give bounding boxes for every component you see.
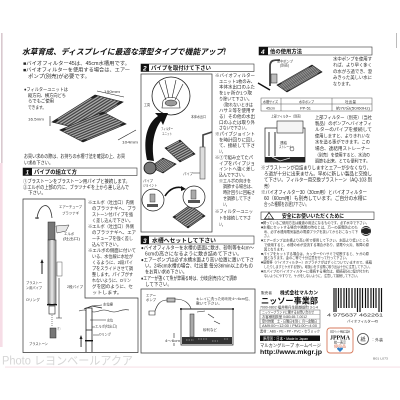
purchase note bbox=[24, 153, 125, 166]
step 1 side text: ※エルボ（吐出口）内側 bbox=[88, 199, 134, 206]
assembly diagram labels: ブラストーン bbox=[29, 341, 48, 346]
step 1 side text: ットします。 bbox=[92, 289, 122, 296]
assembly diagram labels: ン用パイプ bbox=[26, 285, 42, 290]
step 1 heading bbox=[23, 168, 137, 176]
step 2 side text: 口のふたは取り外 bbox=[219, 119, 255, 126]
step 2 side text: さないで下さい。 bbox=[219, 125, 249, 132]
vendor information block: 素材：ABS・PE・PP・PVC・セラミック bbox=[260, 328, 320, 334]
submersible pump drawing: 水中ポンプ bbox=[277, 58, 293, 64]
vendor information block: AM9:00〜12:00 / PM1:00〜4:00 bbox=[262, 324, 317, 328]
upper filter text: 使用しますと、よりきれいな bbox=[315, 132, 370, 140]
step 2 side text: ※エルボの向きを bbox=[219, 177, 251, 183]
step 3 instructions: い。245cm水槽の場合、吐出量 毎分3ℓ/min以上のもの bbox=[145, 262, 253, 270]
filter unit label: ユニット bbox=[162, 132, 172, 136]
step 2 side text: ※①で組み立てたパ bbox=[215, 154, 253, 161]
step 4 heading: 4 bbox=[260, 49, 265, 56]
upper filter text: 水を造る事ができます。この bbox=[315, 138, 370, 146]
assembly diagram labels: ブラストー bbox=[26, 280, 42, 285]
submersible pump text: の水がろ過でき、澄 bbox=[333, 68, 372, 75]
upper filter text: 場合、連結用ストレーナー bbox=[315, 145, 370, 152]
blast stone notes: ※バイオフィルター30（30cm用）とバイオフィルター bbox=[261, 189, 367, 196]
tank setup diagram frame bbox=[141, 289, 255, 353]
step 3 instructions bbox=[141, 244, 254, 288]
safety fine print: 因となります。 bbox=[264, 246, 286, 251]
step 2 side text: を1ヶ所か1つ取 bbox=[219, 90, 252, 97]
step 3 instructions: ●バイオフィルターを水槽の底面に敷き、砂利等を4cm〜 bbox=[141, 244, 254, 252]
safety fine print: ■飼っているご使用方法は最適の用法になるものです。必ず水中で下さい。 bbox=[261, 220, 369, 225]
step 1 side text: 整します。パイプがす bbox=[92, 271, 133, 278]
filter unit note: 縦方向、横方向どち bbox=[28, 92, 66, 99]
step 3 instructions: をお買い求め下さい。 bbox=[145, 268, 187, 276]
intro notes bbox=[23, 60, 130, 80]
step 1 side text: ストーン付パイプを強 bbox=[92, 211, 133, 218]
barcode: バイオフィルター45 bbox=[347, 318, 378, 324]
filter unit drawing with dimensions: 16.5mm bbox=[28, 118, 44, 122]
blast stone notes: ろ過が十分に出来ません。早めに新しい製品と交換し bbox=[264, 170, 372, 178]
pump compatibility table bbox=[261, 98, 372, 111]
filter unit drawing with dimensions: 190mm bbox=[104, 90, 120, 94]
step 1 instructions bbox=[23, 178, 130, 196]
vendor information block: マルカングループ ホームページ bbox=[260, 342, 321, 349]
pipe joint detail circles: パイプ bbox=[143, 178, 153, 183]
safety fine print: め、必ず水槽用電気製品の電源プラグを抜いてからおこなって下 bbox=[264, 229, 358, 234]
vendor information block: 販売者 bbox=[261, 290, 272, 295]
safety fine print: で使用すると、水槽の水が逆流する場合があり、感電や火災、故障の原 bbox=[264, 242, 369, 247]
filter unit drawing with dimensions: 104mm bbox=[122, 140, 138, 144]
safety fine print: ■のパイプのバイオフィルターに接続する場合は、接続部分に傷が付かれ bbox=[261, 268, 369, 273]
submersible pump text: みきった美しい水に bbox=[333, 74, 372, 81]
step 1 side text: のブラツナギへ、ブラ bbox=[92, 205, 136, 212]
title: 水草育成、ディスプレイに最適な薄型タイプで機能アップ! bbox=[22, 48, 226, 56]
watermark: Photo レヨンベールアクア bbox=[2, 354, 133, 368]
JPPMA badge bbox=[327, 328, 353, 353]
vendor information block: 原産国：日本・Made in Japan bbox=[263, 335, 308, 341]
submersible pump text: なります。 bbox=[333, 80, 353, 88]
step 2 heading: 2 bbox=[142, 66, 147, 72]
upper filter drawing: 上部フィルター（別売） bbox=[271, 114, 303, 118]
pump compatibility table: 水中ポンプ bbox=[299, 99, 314, 104]
step 2 side text: 時計回りに回転さ bbox=[223, 189, 255, 196]
safety fine print: したりしますとケガする恐れ。取扱いをする際に取り出は十分に注意して下さい。 bbox=[264, 264, 372, 269]
step 2 side text: を時計回りに回し bbox=[219, 136, 255, 143]
upper filter text: （別売）を使用すると、水流の bbox=[315, 152, 370, 158]
blast stone notes: 売） bbox=[264, 183, 272, 190]
assembly diagram labels: ブラツナギ bbox=[62, 210, 79, 216]
safety fine print: ■感電等（バイオフィルター）のプラチナがはずっとついていますので、紙箱 bbox=[261, 260, 372, 265]
step 2 side text: 調節する場合は、 bbox=[223, 183, 255, 190]
icon: paper recycling mark: ：外装 bbox=[371, 337, 383, 342]
JPPMA badge: 日本ペット用品工業会 bbox=[330, 330, 350, 334]
pipe joint detail circles: ジョイント bbox=[143, 184, 157, 188]
aquarium tank with pipe and gravel bbox=[180, 308, 234, 345]
step 1 instructions: ②エルボの上部の穴に、ブラツナギを上から差し込んで bbox=[23, 184, 129, 191]
vendor information block: 株式会社マルカン bbox=[280, 290, 318, 296]
pump compatibility table: 吐出量 bbox=[345, 99, 356, 104]
intro notes: ■バイオフィルター45は、45cm水槽用です。 bbox=[23, 60, 130, 67]
vendor information block: ニッソー事業部 bbox=[261, 296, 318, 306]
panel: step 3 set in tank bbox=[141, 236, 255, 353]
magnified outlet circle: 工具 bbox=[144, 102, 150, 107]
upper filter drawing bbox=[265, 114, 305, 162]
step 2 side text: ハサミ等を使用す bbox=[219, 107, 255, 114]
assembly diagram labels: エルボ bbox=[64, 231, 74, 236]
safety heading bbox=[261, 212, 374, 220]
assembly diagram frame bbox=[23, 199, 138, 352]
inset diagram: water level and O-ring: 水位線 bbox=[103, 302, 113, 306]
upper filter text: ルターのパイプを接続して bbox=[315, 126, 372, 133]
step 1 side text: 込んで下さい。 bbox=[92, 241, 121, 248]
magnified outlet circle: 本体水出口 bbox=[191, 114, 206, 119]
blast stone notes: ※ブラストーンが目詰まりしますとエアーが少なくなり、 bbox=[261, 164, 371, 172]
step 3 instructions: して下さい。 bbox=[145, 281, 172, 288]
step 2 side text: ※パイプジョイント bbox=[215, 132, 255, 138]
JPPMA badge: 統一表示 bbox=[334, 340, 346, 344]
step 2 side text: ※バイオフィルター bbox=[215, 72, 255, 79]
vertical pipe with spout: パイプ bbox=[183, 171, 193, 176]
intro notes: ポンプ(別売)が必要です。 bbox=[28, 73, 90, 80]
step 2 side text: 本体水出口のふた bbox=[219, 84, 255, 91]
safety fine print: ■水槽にセットする場合や隣間の時なとは、万一の感電防止のた bbox=[261, 224, 358, 229]
step 2 side text: ※フィルターユニッ bbox=[215, 208, 253, 215]
step 2 side text: ユニット1枚のみ、 bbox=[219, 78, 255, 85]
submersible pump drawing: (別売) bbox=[280, 62, 289, 68]
print code: B01 L073 bbox=[373, 356, 389, 360]
upper filter text: 調節も出来、とても便利です。 bbox=[315, 158, 370, 164]
inset diagram: water level and O-ring: 水位 bbox=[107, 318, 113, 322]
filter unit note bbox=[24, 86, 68, 111]
vendor information block: 受付時間 土・日曜日を除く 月〜金曜日 bbox=[262, 318, 317, 324]
barcode: 4 975637 462261 bbox=[327, 312, 384, 318]
step 4 heading bbox=[259, 47, 372, 56]
step 2 heading bbox=[141, 64, 254, 72]
step 2 drawing frame bbox=[141, 74, 212, 232]
step 1 side text bbox=[88, 199, 136, 296]
vendor information block: お客様相談室 0480-65-7-0012 bbox=[262, 314, 307, 319]
step 2 side text: い。 bbox=[223, 202, 229, 207]
tank labels and height dimension: 敷いて下さい。 bbox=[196, 300, 222, 306]
blast stone notes bbox=[261, 164, 372, 208]
step 2 side text: い。 bbox=[219, 222, 225, 227]
step 1 side text: れないように、Oリン bbox=[92, 277, 131, 284]
safety fine print bbox=[261, 220, 372, 278]
step 2 side text: イプをパイプジョ bbox=[219, 160, 255, 167]
blast stone notes: て下さい。フィルター用交換ブラストーン（AQ-103 別 bbox=[264, 176, 372, 184]
inset diagram: water level and O-ring: エルボ(吐出口) bbox=[95, 324, 117, 328]
panel: step 1 pipe assembly bbox=[23, 168, 138, 352]
safety heading: 安全にお使いいただくために bbox=[282, 212, 344, 220]
step 2 side text: せ調節して下さ bbox=[223, 195, 251, 202]
magnified outlet circle bbox=[144, 77, 206, 119]
step 1 heading: パイプの組立て方 bbox=[34, 168, 77, 176]
step 2 side text: て、接続して下さ bbox=[219, 142, 255, 149]
icon: paper recycling mark bbox=[358, 334, 383, 344]
air pump: エアー bbox=[146, 292, 156, 298]
panel: safety notice bbox=[261, 212, 374, 278]
step 4 heading: 他の使用方法 bbox=[270, 48, 302, 56]
air pump: ポンプ bbox=[146, 297, 156, 302]
step 3 instructions: ●エアーポンプは必ず水槽水面より高い位置に置いて下さ bbox=[141, 256, 254, 264]
panel: step 4 other uses bbox=[258, 47, 372, 208]
inset diagram: water level and O-ring bbox=[79, 302, 129, 352]
safety fine print: ないようにやすりで、ケガをしないように、注意して接続して下さい。 bbox=[264, 273, 360, 278]
tank labels and height dimension: 砂利など bbox=[203, 327, 217, 332]
blast stone notes: 60（60cm用）も別売しています。ご自分の水槽に bbox=[264, 195, 367, 202]
filter unit label bbox=[161, 126, 173, 136]
submersible pump text bbox=[333, 56, 372, 88]
step 2 side text: る）その他の水出 bbox=[219, 113, 255, 120]
tank labels and height dimension: 4〜6cm bbox=[165, 339, 180, 343]
step 1 side text: グを図のように、セ bbox=[92, 283, 133, 290]
intro notes: ■バイオフィルターを使用する場合は、エアー bbox=[23, 66, 130, 74]
safety fine print: 因となります。金のこ等で十分注意を行って行って下さい。 bbox=[264, 255, 349, 260]
safety fine print: ■パイプをカットする場合は、カッターやハサミで切断すると、ケガの原 bbox=[261, 251, 369, 256]
filter units exploded bbox=[144, 140, 205, 228]
barcode bbox=[327, 288, 384, 324]
step 1 side text: のブラツナギへ、エア bbox=[92, 229, 136, 236]
assembly diagram labels: エアーチューブ bbox=[59, 204, 82, 209]
filter unit note: ●フィルターユニットは bbox=[24, 86, 68, 93]
step 1 side text: くるように、2段パイ bbox=[92, 259, 133, 266]
step 3 heading: 3 bbox=[143, 238, 147, 245]
vendor information block: ニッソーブランドに関するお問い合わせ bbox=[262, 310, 314, 314]
upper filter text bbox=[315, 114, 372, 164]
step 1 side text: く差し込んで下さい。 bbox=[92, 217, 133, 224]
pump compatibility table: 45cm bbox=[266, 106, 275, 110]
step 3 instructions: ●エアーが強くて魚が弊踊る時は、分岐(別売)などで調節 bbox=[141, 275, 237, 282]
pump compatibility table: 約7ℓ/分(50/60Hz) bbox=[336, 106, 370, 110]
safety fine print: さい。 bbox=[264, 233, 271, 238]
assembly diagram labels: Oリング bbox=[26, 297, 40, 302]
step 1 heading: 1 bbox=[26, 170, 30, 176]
safety heading: ! bbox=[268, 214, 270, 220]
step 3 heading: 水槽へセットして下さい bbox=[152, 236, 216, 244]
step 1 instructions: ①ブラストーンをブラストーン用パイプと接続します。 bbox=[23, 178, 130, 185]
vendor information block: 7000-0802 福井県丹生郡越前町 3-1-4 bbox=[260, 304, 318, 310]
icon: paper recycling mark: 紙 bbox=[360, 336, 366, 343]
panel: step 2 attach pipe bbox=[141, 64, 255, 232]
assembly diagram labels: ① bbox=[57, 326, 61, 331]
step 1 side text: ※エルボ（吐出口）外側 bbox=[88, 223, 134, 230]
step 2 side text: 込んで下さい。 bbox=[219, 172, 247, 178]
big curved arrow bbox=[145, 113, 168, 161]
pump compatibility table: 水槽サイズ bbox=[263, 99, 278, 104]
purchase note: お買い求めの際は、お持ちの水槽寸法を確認の上、お買 bbox=[24, 153, 125, 160]
step 2 side text: トを接続して下さ bbox=[219, 214, 251, 222]
upper filter text: 製品）のポンプへバイオフィ bbox=[315, 120, 372, 127]
inset diagram: water level and O-ring: Oリング bbox=[99, 332, 111, 336]
JPPMA badge: JPPMA bbox=[330, 334, 350, 342]
purchase note: い求め下さい。 bbox=[24, 160, 53, 166]
assembly diagram labels: 2段パイプ bbox=[67, 284, 83, 289]
step 1 side text: ※エルボの側面に付いて bbox=[88, 247, 136, 254]
step 1 instructions: 下さい。 bbox=[28, 190, 46, 196]
upper filter drawing: ストレーナー bbox=[279, 144, 294, 149]
tank labels and height dimension: キレイに洗った砂利を4〜6cm位、 bbox=[196, 296, 252, 301]
tank labels and height dimension bbox=[165, 296, 252, 346]
filter unit label: フィルター bbox=[161, 126, 173, 131]
filter unit drawing with dimensions bbox=[28, 90, 138, 144]
step 2 side text: （取れないときは bbox=[221, 101, 253, 108]
step 2 side text: り除いて下さい。 bbox=[219, 95, 252, 102]
vendor information block: http://www.mkgr.jp bbox=[260, 349, 322, 356]
blast stone notes: 合った種類をお選び下さい。 bbox=[264, 201, 309, 208]
filter unit note: らでもご使用 bbox=[28, 98, 54, 104]
air pump bbox=[146, 292, 192, 315]
step 2 heading: パイプを取付けて下さい bbox=[151, 64, 211, 72]
submersible pump text: れば、より早く多く bbox=[333, 62, 372, 68]
step 3 instructions: 6cmの高さになるように敷き詰めて下さい。 bbox=[145, 250, 242, 258]
safety fine print: ■エアーポンプは水槽より高い所で使用して下さい。水面より低いところ bbox=[261, 238, 369, 243]
pipe joint detail circles bbox=[142, 178, 205, 211]
step 1 side text: ーチューブを強く差し bbox=[92, 235, 133, 242]
vendor information block bbox=[260, 290, 322, 356]
pump compatibility table: PP-51 bbox=[300, 106, 311, 110]
submersible pump drawing bbox=[258, 58, 322, 92]
filter unit note: できます。 bbox=[28, 104, 46, 111]
assembly diagram: pipe and elbow bbox=[35, 206, 69, 338]
step 2 side text: い。 bbox=[219, 149, 225, 154]
vertical pipe with spout bbox=[183, 132, 212, 179]
upper filter text: 上部フィルター（別売）（当社 bbox=[315, 114, 372, 121]
step 3 heading bbox=[141, 236, 254, 245]
icon: safety emblem bbox=[361, 226, 371, 236]
step 1 side text: プをスライドさせて調 bbox=[92, 265, 133, 272]
submersible pump text: 水中ポンプを使用す bbox=[333, 56, 372, 62]
assembly diagram labels bbox=[26, 204, 83, 346]
assembly diagram labels: (吐出口) bbox=[63, 236, 80, 241]
step 2 side text: イントへ強く差し bbox=[219, 166, 255, 173]
step 1 side text: いる、水位線に水位が bbox=[92, 253, 133, 260]
step 2 side text bbox=[215, 72, 255, 227]
JPPMA badge: 優良品 bbox=[334, 344, 346, 348]
upper filter drawing: 連結 bbox=[280, 140, 287, 145]
